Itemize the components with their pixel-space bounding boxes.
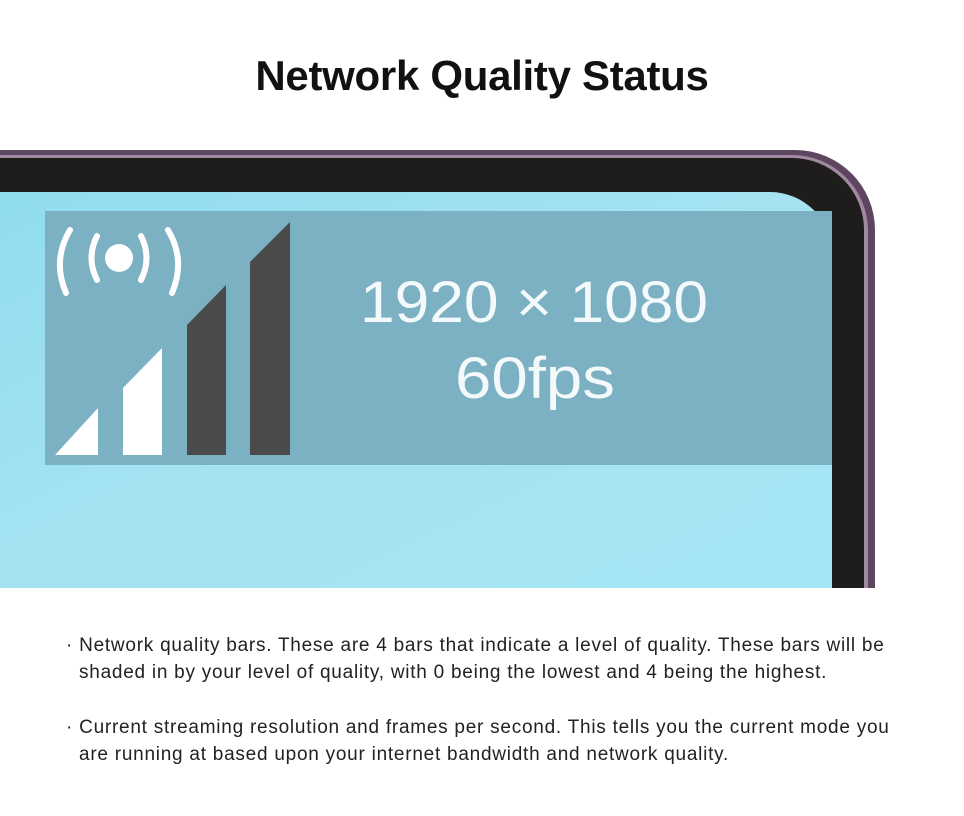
note: bars: · Network quality bars. These are 4 bars that indicate a level of quality. These bars will be [66,635,885,656]
status overlay panel [45,211,832,465]
device frame [0,150,875,588]
note: bars [66,635,885,683]
icon: broadcast signal [60,230,178,293]
resolution and fps text: 60fps [455,346,615,411]
note: resolution: · Current streaming resolution and frames per second. This tells you the current mode you [66,717,890,738]
note: resolution: are running at based upon your internet bandwidth and network quality. [79,744,729,765]
note: bars: shaded in by your level of quality, with 0 being the lowest and 4 being the highest. [79,662,827,683]
device screenshot [0,150,875,588]
note: resolution [66,717,890,765]
resolution and fps text: 1920 × 1080 [360,270,708,335]
notes [66,635,890,765]
title: Network Quality Status [255,52,709,99]
network quality bars [55,222,290,455]
resolution and fps text [360,270,708,411]
